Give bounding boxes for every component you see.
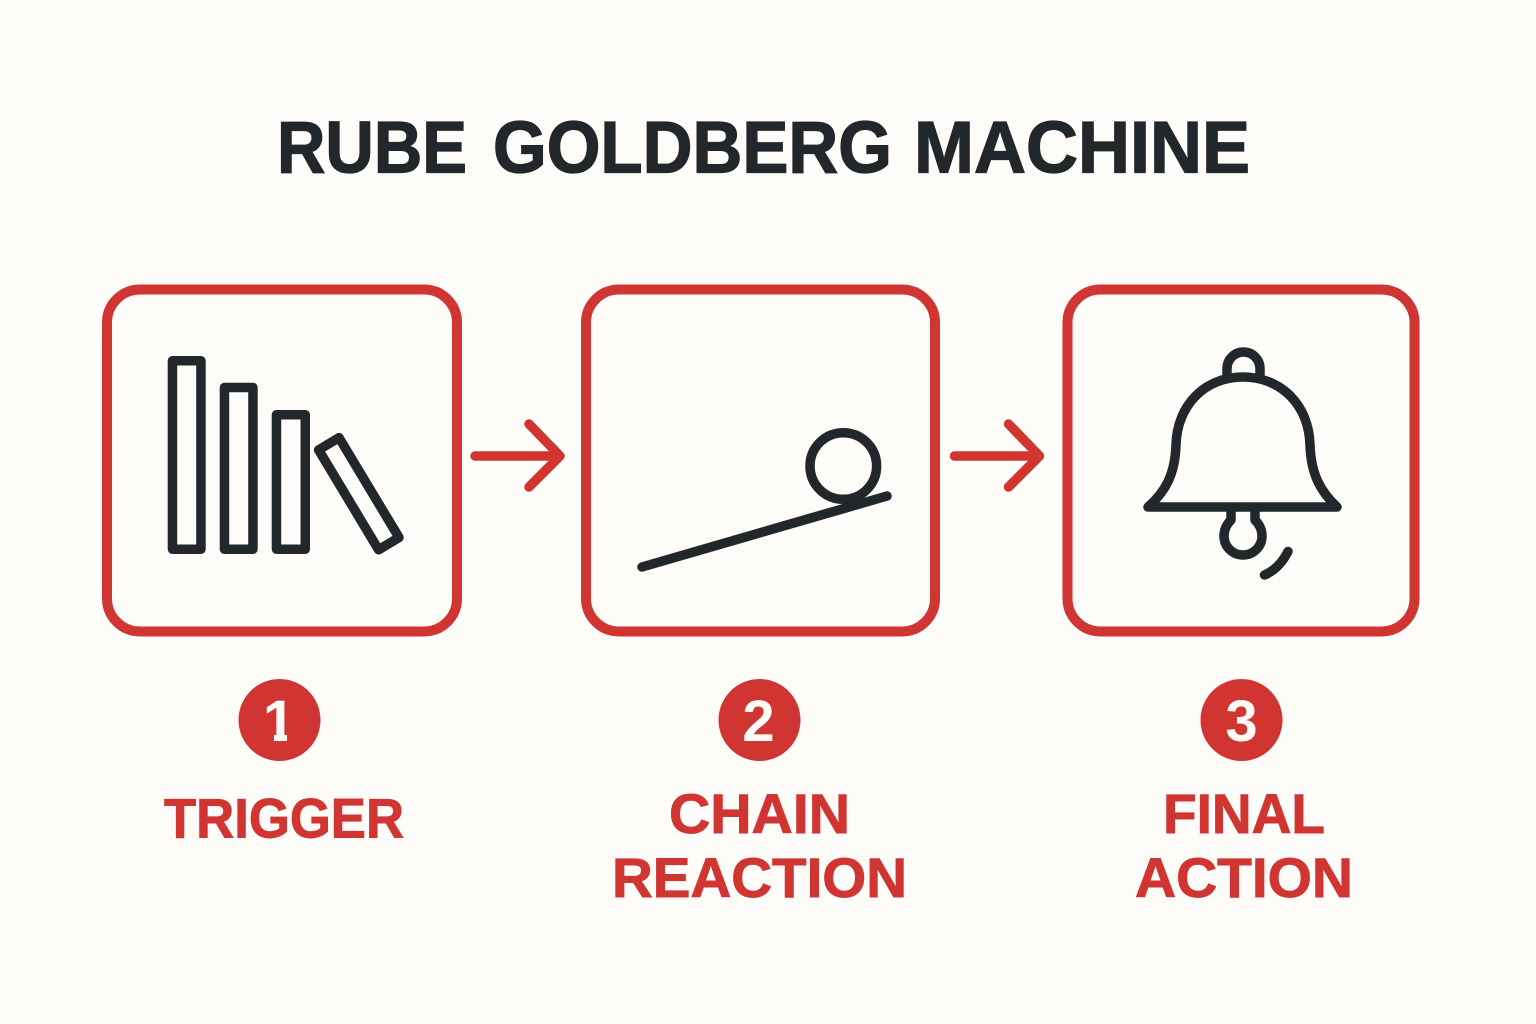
icon: ball on ramp (642, 433, 887, 567)
number badge 2: 2 (742, 689, 775, 754)
label: final action (1135, 782, 1353, 909)
title: GOLDBERG (493, 108, 892, 188)
step 3: final action (1135, 679, 1353, 909)
title: MACHINE (914, 108, 1250, 188)
icon: ringing bell (1148, 352, 1337, 575)
step 2: chain reaction (612, 679, 907, 909)
label: final action: ACTION (1135, 846, 1353, 909)
panel frame: chain reaction (586, 290, 935, 632)
panel: chain reaction (586, 290, 935, 632)
label: trigger: TRIGGER (164, 786, 404, 850)
icon: falling dominoes (172, 361, 399, 550)
number badge 3: 3 (1225, 689, 1258, 754)
label: chain reaction: CHAIN (669, 782, 850, 845)
label: chain reaction (612, 782, 907, 909)
arrow: trigger to chain reaction (475, 424, 560, 487)
arrow: chain reaction to final action (954, 424, 1040, 487)
panel: trigger (107, 290, 457, 632)
number badge 3 (1200, 679, 1282, 761)
label: chain reaction: REACTION (612, 846, 907, 909)
step 1: trigger (164, 679, 404, 850)
number badge 1 (238, 679, 320, 761)
number badge 2 (718, 679, 800, 761)
label: final action: FINAL (1163, 782, 1325, 845)
title: RUBE (277, 108, 467, 188)
panel: final action (1068, 290, 1414, 632)
number badge 1: 1 (263, 689, 295, 754)
title (277, 108, 1250, 188)
panel frame: final action (1068, 290, 1414, 632)
panel frame: trigger (107, 290, 457, 632)
